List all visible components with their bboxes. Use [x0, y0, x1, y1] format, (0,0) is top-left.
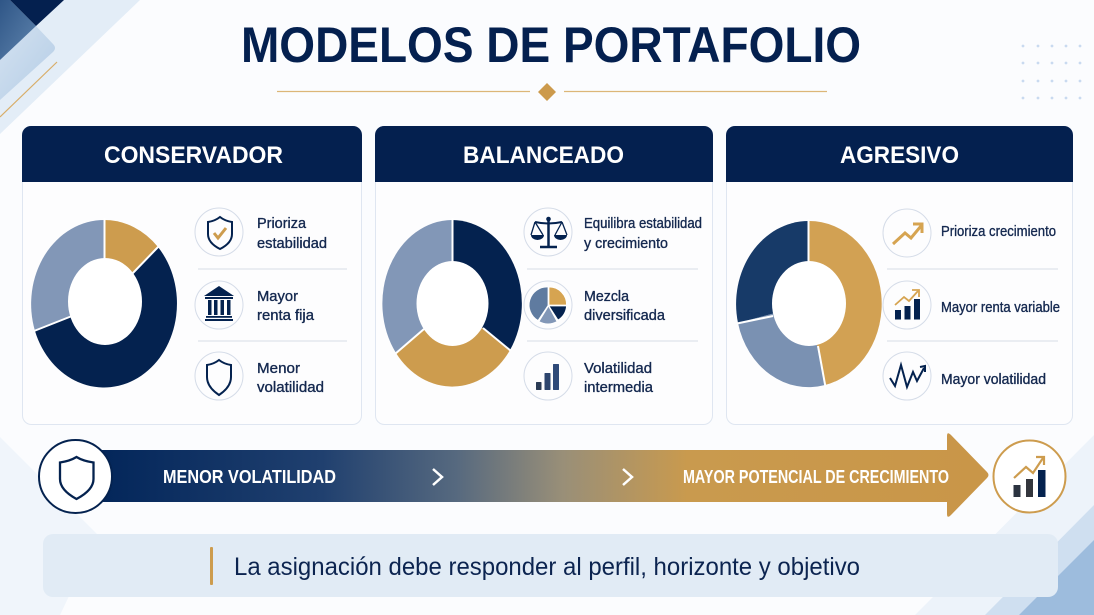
- text: mayor renta fija: renta fija: [257, 308, 315, 324]
- callout: bottom message: [43, 534, 1058, 597]
- text: mezcla diversificada: Mezcla: [584, 289, 630, 305]
- text: volatilidad intermedia: Volatilidad: [584, 361, 652, 377]
- icon: bank building: [195, 281, 243, 329]
- text: equilibra estabilidad y crecimiento: Equilibra estabilidad: [584, 216, 702, 232]
- text: equilibra estabilidad y crecimiento: [584, 216, 702, 252]
- heading: conservador: CONSERVADOR: [104, 142, 283, 169]
- icon: diversified pie: [524, 281, 572, 329]
- text: volatilidad intermedia: [584, 361, 654, 396]
- text: prioriza estabilidad: [257, 216, 327, 252]
- text: equilibra estabilidad y crecimiento: y crecimiento: [584, 236, 668, 252]
- title ornament: gold lines and diamond: [277, 83, 827, 101]
- donut chart: balanceado: [382, 218, 522, 387]
- icon: shield: [195, 352, 243, 400]
- text: mezcla diversificada: [584, 289, 666, 324]
- text: mayor potencial de crecimiento: MAYOR POTENCIAL DE CRECIMIENTO: [683, 467, 949, 487]
- icon: chevron left: [433, 469, 442, 485]
- text: menor volatilidad: MENOR VOLATILIDAD: [163, 467, 336, 487]
- heading: balanceado: [375, 126, 713, 182]
- background decoration: dot grid: [1022, 45, 1081, 99]
- icon: chevron right: [623, 469, 632, 485]
- title: MODELOS DE PORTAFOLIO: [241, 17, 861, 73]
- icon: rising bars: [524, 352, 572, 400]
- text: mezcla diversificada: diversificada: [584, 308, 666, 324]
- text: prioriza crecimiento: Prioriza crecimiento: [941, 224, 1056, 240]
- heading: agresivo: AGRESIVO: [840, 142, 959, 169]
- icon: volatility line: [883, 352, 931, 400]
- panel: agresivo: [726, 126, 1073, 424]
- text: mayor renta variable: Mayor renta variable: [941, 300, 1060, 316]
- panel: balanceado: [375, 126, 713, 424]
- text: mayor volatilidad: Mayor volatilidad: [941, 372, 1046, 388]
- text: prioriza estabilidad: Prioriza: [257, 216, 307, 232]
- text: mayor renta fija: Mayor: [257, 289, 298, 305]
- donut chart: agresivo: [736, 219, 882, 387]
- text: prioriza estabilidad: estabilidad: [257, 236, 327, 252]
- background decoration: bottom-right shapes: [915, 435, 1094, 615]
- background decoration: top-left geometric shapes: [0, 0, 140, 134]
- heading: balanceado: BALANCEADO: [463, 142, 624, 169]
- callout: bottom message: La asignación debe responder al perfil, horizonte y objetivo: [234, 553, 860, 581]
- heading: conservador: [22, 126, 362, 182]
- icon: bars with growth arrow: [883, 281, 931, 329]
- icon: shield with check: [195, 208, 243, 256]
- text: menor volatilidad: volatilidad: [257, 380, 324, 396]
- text: volatilidad intermedia: intermedia: [584, 380, 654, 396]
- icon: balance scale: [524, 208, 572, 256]
- icon: shield badge: [39, 440, 112, 513]
- icon: growth arrow: [883, 209, 931, 257]
- text: mayor renta fija: [257, 289, 315, 324]
- text: menor volatilidad: Menor: [257, 361, 300, 377]
- arrow: volatility to growth spectrum: [100, 433, 988, 517]
- background decoration: bottom-left pale triangle: [0, 437, 98, 615]
- donut chart: conservador: [31, 218, 177, 387]
- panel: conservador: [22, 126, 362, 424]
- icon: growth badge: [994, 440, 1066, 512]
- text: menor volatilidad: [257, 361, 324, 396]
- heading: agresivo: [726, 126, 1073, 182]
